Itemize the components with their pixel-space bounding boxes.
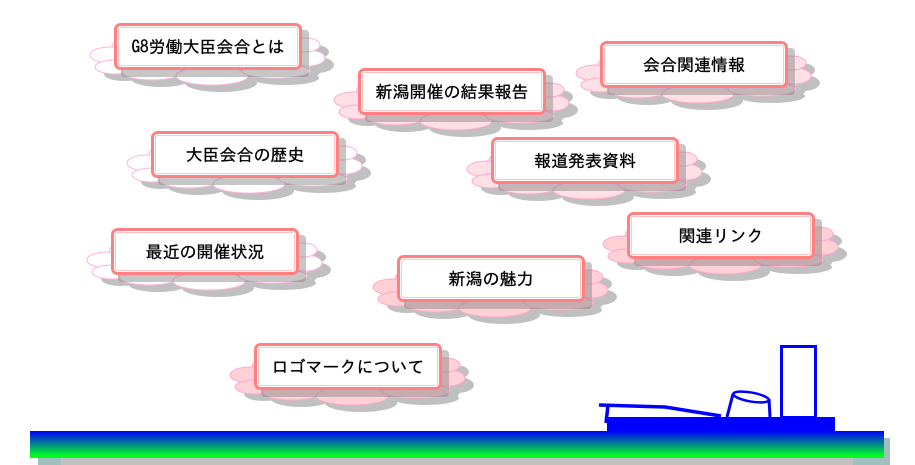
button: 新潟の魅力 <box>373 256 617 324</box>
button: G8労働大臣会合とは <box>90 24 334 92</box>
sea band <box>30 431 890 465</box>
button: 関連リンク: 関連リンク <box>678 227 764 245</box>
button: ロゴマークについて: ロゴマークについて <box>272 358 424 376</box>
button: 最近の開催状況: 最近の開催状況 <box>146 243 264 261</box>
button: 報道発表資料 <box>467 138 711 206</box>
button: 新潟の魅力: 新潟の魅力 <box>448 270 534 288</box>
button: 大臣会合の歴史: 大臣会合の歴史 <box>186 146 304 164</box>
button: G8労働大臣会合とは: G8労働大臣会合とは <box>132 38 284 56</box>
button: 大臣会合の歴史 <box>127 132 371 200</box>
button: 新潟開催の結果報告 <box>334 70 578 137</box>
button: 関連リンク <box>603 214 847 281</box>
icon: ship <box>599 346 835 432</box>
button: 会合関連情報 <box>576 42 820 110</box>
button: ロゴマークについて <box>230 344 474 412</box>
button: 会合関連情報: 会合関連情報 <box>643 56 745 74</box>
button: 報道発表資料: 報道発表資料 <box>534 152 636 170</box>
button: 新潟開催の結果報告: 新潟開催の結果報告 <box>376 83 528 101</box>
button: 最近の開催状況 <box>87 230 331 297</box>
